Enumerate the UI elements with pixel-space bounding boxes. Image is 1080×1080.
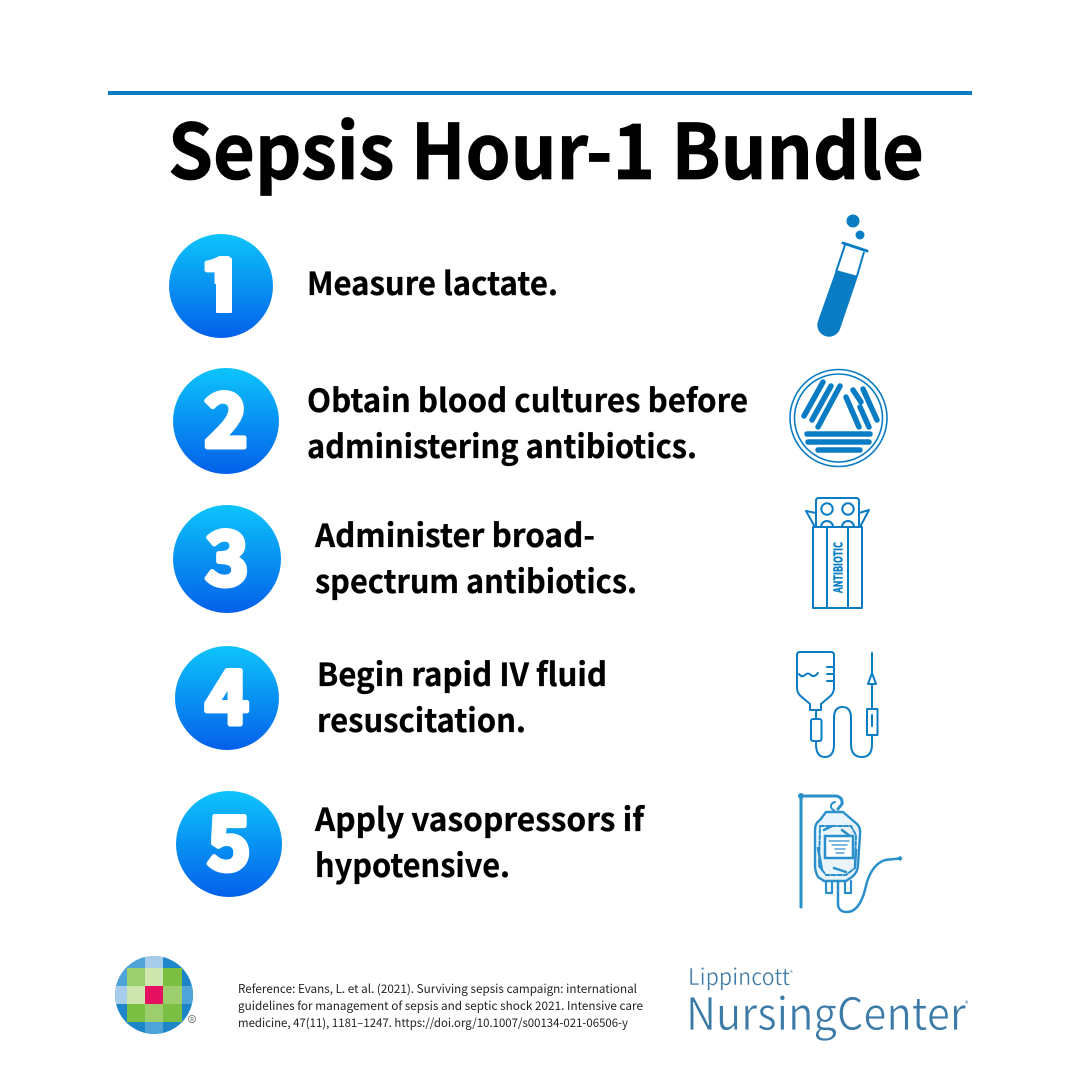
icon: IV bag on pole: [798, 793, 902, 912]
step 5 text: Apply vasopressors if: [314, 795, 645, 841]
step 2 badge: 2: [204, 362, 248, 469]
top rule: [108, 91, 972, 95]
title: Sepsis Hour-1 Bundle: [168, 91, 924, 201]
step 4 text: resuscitation.: [317, 696, 526, 742]
reference text: guidelines for management of sepsis and septic shock 2021. Intensive care: [238, 997, 643, 1014]
step 2 text: administering antibiotics.: [307, 422, 697, 468]
step 3 badge: 3: [205, 500, 249, 607]
step 4 text: Begin rapid IV fluid: [317, 650, 607, 696]
step 5 text: [314, 795, 645, 887]
step 1 text: Measure lactate.: [307, 259, 558, 305]
step 3 text: spectrum antibiotics.: [315, 557, 637, 603]
reference text: Reference: Evans, L. et al. (2021). Surviving sepsis campaign: international: [238, 980, 637, 997]
reference text: [238, 980, 643, 1031]
step 1 badge: [169, 227, 273, 338]
step 5 badge: [176, 785, 282, 897]
logo: Lippincott NursingCenter: NursingCenter: [686, 978, 966, 1043]
step 2 text: Obtain blood cultures before: [307, 376, 748, 422]
step 4 text: [317, 650, 607, 742]
step 2 badge: [173, 362, 279, 474]
step 4 badge: 4: [205, 639, 249, 746]
step 3 text: Administer broad-: [314, 511, 595, 557]
logo: Wolters Kluwer: [115, 956, 196, 1034]
step 3 badge: [173, 500, 281, 613]
icon: antibiotic box: [806, 498, 869, 608]
icon: antibiotic box: ANTIBIOTIC: [830, 542, 846, 594]
logo: Lippincott NursingCenter: ®: [790, 968, 793, 977]
step 1 badge: 1: [199, 227, 243, 334]
step 2 text: [307, 376, 748, 468]
step 4 badge: [175, 639, 279, 750]
step 5 text: hypotensive.: [315, 841, 510, 887]
step 5 badge: 5: [207, 785, 251, 892]
icon: test tube: [817, 214, 867, 337]
reference text: medicine, 47(11), 1181–1247. https://doi.org/10.1007/s00134-021-06506-y: [238, 1014, 628, 1031]
icon: IV drip: [797, 652, 878, 757]
step 3 text: [314, 511, 637, 603]
icon: petri dish: [790, 370, 887, 466]
logo: Lippincott NursingCenter: Lippincott: [688, 958, 790, 992]
logo: Lippincott NursingCenter: ®: [965, 999, 969, 1009]
logo: Wolters Kluwer: R: [190, 1014, 194, 1024]
